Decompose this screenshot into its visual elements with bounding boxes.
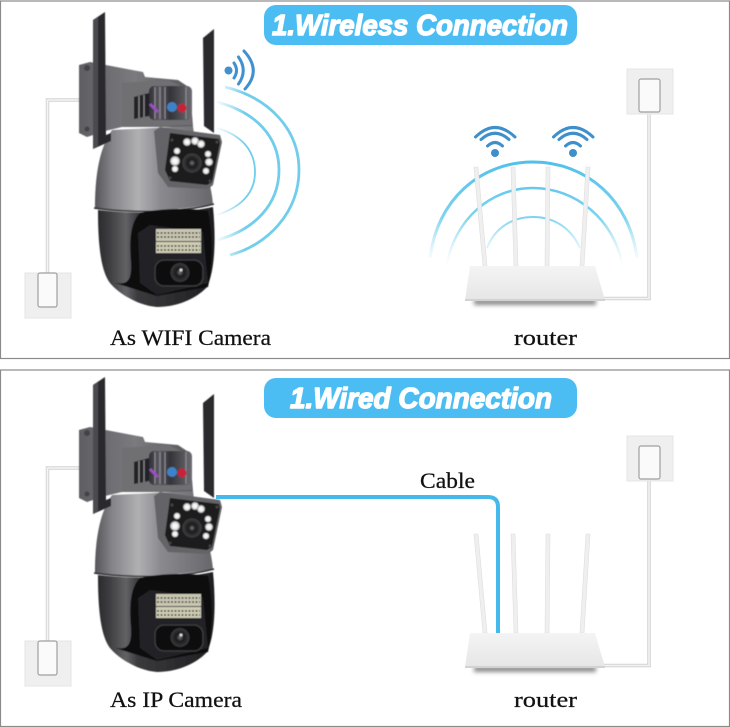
panel: wired connection	[0, 370, 730, 726]
label: as ip camera: As IP Camera	[110, 687, 242, 712]
icon: security camera	[79, 12, 222, 307]
title: wired connection	[264, 378, 577, 418]
label: router: router	[514, 325, 578, 350]
icon: camera power wire and outlet	[25, 100, 80, 318]
icon: camera power wire and outlet	[25, 468, 80, 686]
title: wireless connection: 1.Wireless Connection	[272, 10, 568, 42]
icon: camera signal waves	[217, 87, 299, 255]
icon: router wifi right	[554, 128, 593, 157]
icon: router wifi left	[476, 128, 515, 157]
panel: wireless connection	[0, 1, 730, 358]
arrow: blue network cable	[216, 497, 498, 633]
title: wired connection: 1.Wired Connection	[290, 383, 552, 415]
label: router: router	[514, 687, 578, 712]
icon: router signal waves	[430, 162, 637, 264]
icon: router	[465, 534, 605, 672]
icon: camera wifi symbol	[224, 51, 253, 89]
icon: security camera	[79, 377, 222, 672]
icon: router power wire and outlet	[600, 69, 673, 298]
icon: router power wire and outlet	[600, 436, 673, 666]
icon: router	[465, 167, 605, 305]
label: cable: Cable	[420, 468, 475, 493]
label: as wifi camera: As WIFI Camera	[110, 325, 271, 350]
